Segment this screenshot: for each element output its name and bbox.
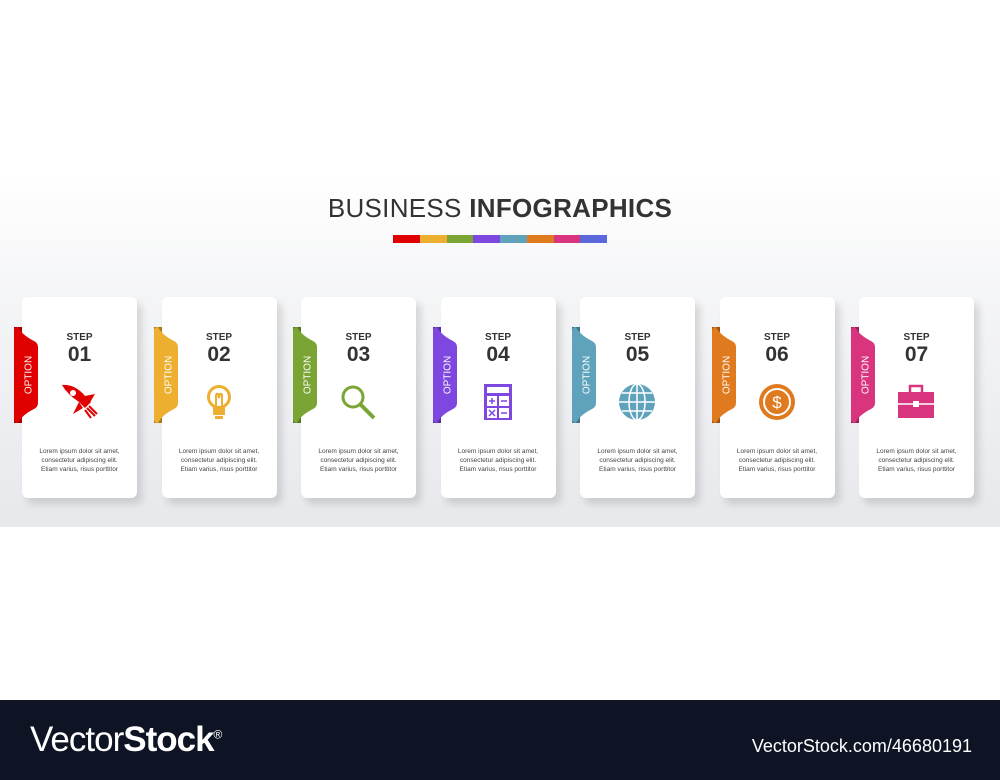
text 04: Etiam varius, risus porttitor xyxy=(460,466,536,473)
text 05 xyxy=(597,448,678,473)
card 04 xyxy=(440,297,556,498)
text 07 xyxy=(876,448,957,473)
tab 01: OPTION xyxy=(24,356,35,394)
icon: coin xyxy=(759,384,795,420)
step 07: STEP xyxy=(903,332,930,343)
tab 05: OPTION xyxy=(582,356,593,394)
text 03: consectetur adipiscing elit. xyxy=(320,457,397,464)
step 03: STEP xyxy=(345,332,372,343)
text 01: Etiam varius, risus porttitor xyxy=(41,466,118,473)
step 05: STEP xyxy=(624,332,651,343)
card 02 xyxy=(162,297,276,498)
step 04 xyxy=(485,332,511,366)
card 01 xyxy=(22,297,137,498)
text 03 xyxy=(318,448,399,473)
text 05: consectetur adipiscing elit. xyxy=(599,457,676,464)
step 03 xyxy=(345,332,372,366)
card 03 xyxy=(301,297,416,498)
title: BUSINESS INFOGRAPHICS xyxy=(328,193,672,223)
icon: globe xyxy=(619,384,655,420)
tab 02: OPTION xyxy=(163,356,174,394)
icon: magnifier xyxy=(342,386,376,420)
tab 06: OPTION xyxy=(721,356,732,394)
text 04 xyxy=(458,448,538,473)
tab 02 xyxy=(154,327,178,423)
tab 01 xyxy=(14,327,38,423)
text 01: consectetur adipiscing elit. xyxy=(41,457,118,464)
step 03: 03 xyxy=(347,343,370,366)
step 01 xyxy=(66,332,93,366)
text 02: consectetur adipiscing elit. xyxy=(181,457,257,464)
footer xyxy=(0,700,1000,780)
step 04: STEP xyxy=(485,332,511,343)
footer id: VectorStock.com/46680191 xyxy=(752,736,972,756)
text 07: Etiam varius, risus porttitor xyxy=(878,466,955,473)
step 06: STEP xyxy=(764,332,790,343)
step 01: 01 xyxy=(68,343,91,366)
step 06: 06 xyxy=(765,343,789,366)
step 02: 02 xyxy=(207,343,231,366)
tab 04 xyxy=(433,327,457,423)
card 07 xyxy=(859,297,974,498)
step 05 xyxy=(624,332,651,366)
text 07: Lorem ipsum dolor sit amet, xyxy=(876,448,957,455)
text 05: Lorem ipsum dolor sit amet, xyxy=(597,448,678,455)
tab 06 xyxy=(712,327,736,423)
icon: calculator xyxy=(484,384,512,420)
text 02: Etiam varius, risus porttitor xyxy=(181,466,257,473)
step 05: 05 xyxy=(626,343,649,366)
icon: briefcase xyxy=(898,384,934,418)
card 06 xyxy=(720,297,834,498)
step 02: STEP xyxy=(206,332,232,343)
footer logo: VectorStock® xyxy=(30,720,221,759)
step 04: 04 xyxy=(486,343,510,366)
icon: bulb xyxy=(207,385,231,419)
text 03: Lorem ipsum dolor sit amet, xyxy=(318,448,399,455)
text 04: consectetur adipiscing elit. xyxy=(460,457,536,464)
step 06 xyxy=(764,332,790,366)
tab 05 xyxy=(572,327,596,423)
step 02 xyxy=(206,332,232,366)
text 02 xyxy=(179,448,259,473)
tab 07: OPTION xyxy=(861,356,872,394)
text 01 xyxy=(39,448,120,473)
color bar xyxy=(393,235,607,243)
icon: rocket xyxy=(62,384,98,419)
text 06: Lorem ipsum dolor sit amet, xyxy=(737,448,817,455)
text 06: Etiam varius, risus porttitor xyxy=(739,466,815,473)
step 01: STEP xyxy=(66,332,93,343)
tab 03 xyxy=(293,327,317,423)
text 06 xyxy=(737,448,817,473)
step 07 xyxy=(903,332,930,366)
card 05 xyxy=(580,297,695,498)
text 05: Etiam varius, risus porttitor xyxy=(599,466,676,473)
text 01: Lorem ipsum dolor sit amet, xyxy=(39,448,120,455)
text 02: Lorem ipsum dolor sit amet, xyxy=(179,448,259,455)
text 06: consectetur adipiscing elit. xyxy=(739,457,815,464)
icon: coin: $ xyxy=(772,393,782,412)
tab 07 xyxy=(851,327,875,423)
step 07: 07 xyxy=(905,343,928,366)
text 07: consectetur adipiscing elit. xyxy=(878,457,955,464)
tab 04: OPTION xyxy=(442,356,453,394)
tab 03: OPTION xyxy=(303,356,314,394)
text 03: Etiam varius, risus porttitor xyxy=(320,466,397,473)
text 04: Lorem ipsum dolor sit amet, xyxy=(458,448,538,455)
